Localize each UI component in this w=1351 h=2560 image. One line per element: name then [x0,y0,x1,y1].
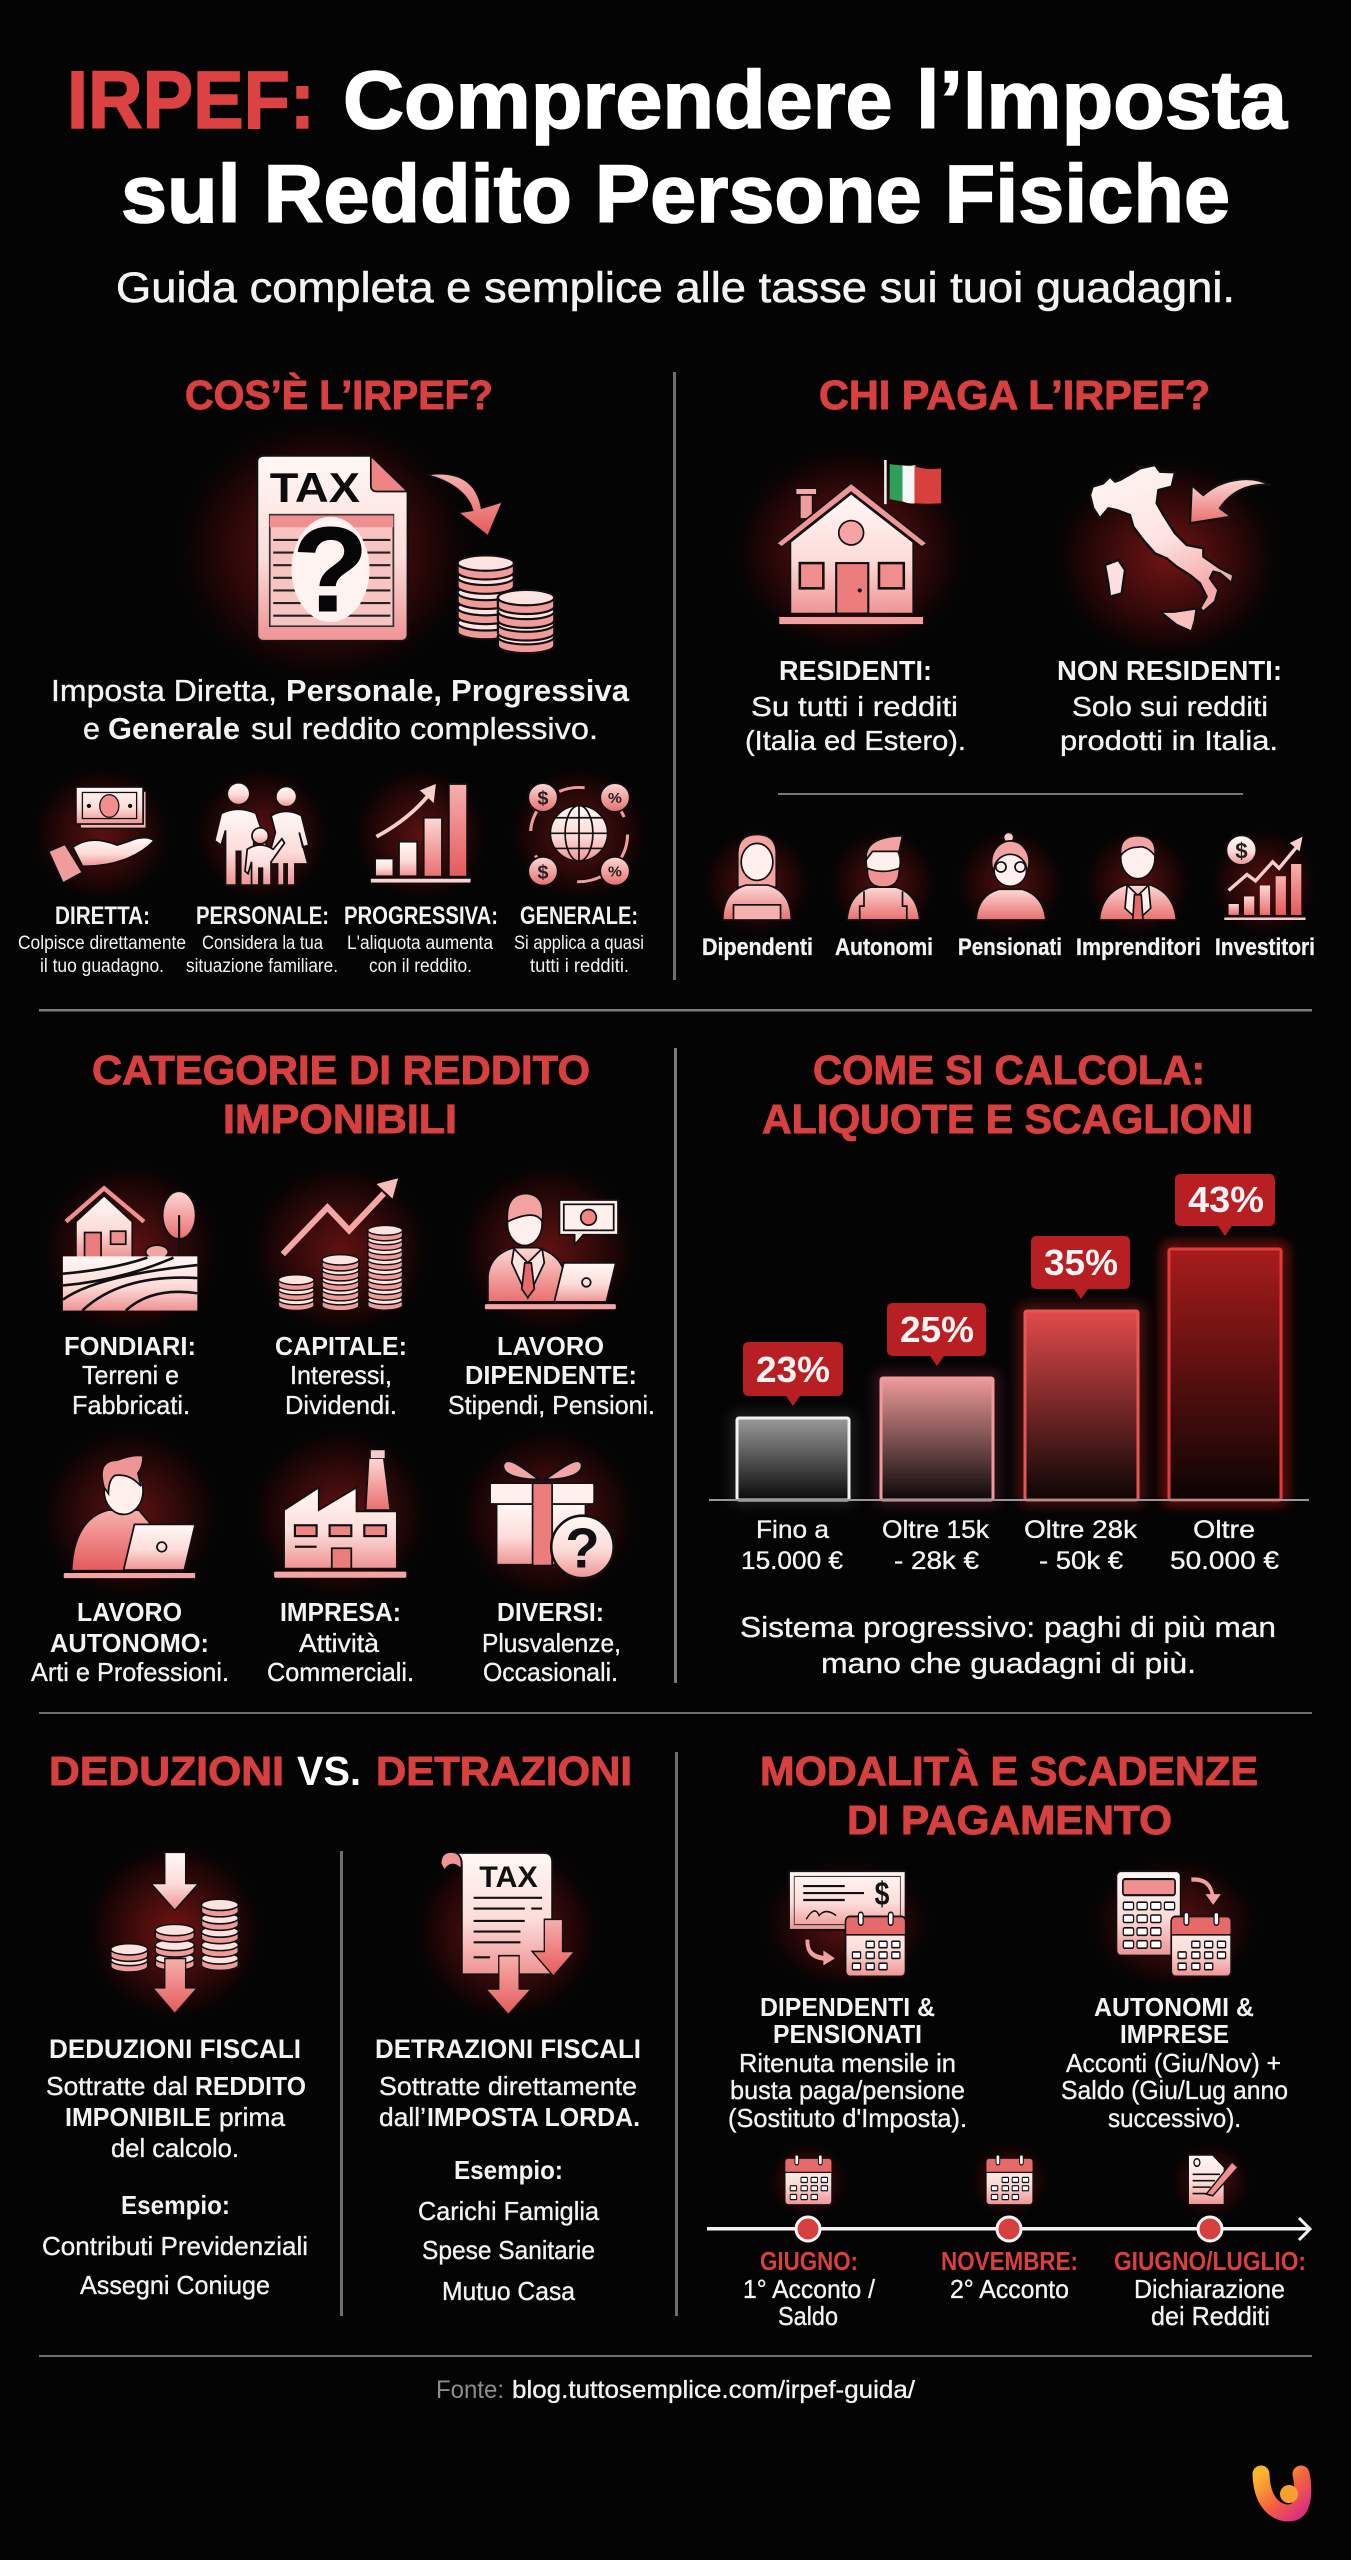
dipendenti text: (Sostituto d'Imposta). [728,2103,967,2133]
item: progressiva: con il reddito. [369,956,472,977]
bracket labels: Oltre 15k [882,1516,990,1544]
icon: gift with question mark [490,1461,614,1579]
heading: ALIQUOTE E SCAGLIONI [762,1096,1253,1142]
bracket labels: - 50k € [1039,1547,1123,1575]
heading: VS. [297,1748,361,1794]
icon: coin stacks [458,555,554,653]
caption: Sistema progressivo: paghi di più man [740,1612,1276,1644]
icon: dipendenti [723,835,791,920]
icon: investitori [1224,835,1306,920]
bar: 23% [737,1418,849,1500]
label: 43% [1175,1174,1275,1236]
panel: categorie di reddito [31,1047,655,1687]
item: progressiva [344,902,498,977]
label: 35%: 35% [1044,1242,1118,1283]
item: capitale [275,1331,407,1420]
taxpayer labels: Autonomi [835,934,933,961]
non residenti text: prodotti in Italia. [1060,725,1278,756]
dipendenti text [728,1992,967,2133]
icon: tax scroll with arrows [442,1853,575,2015]
milestone dot: giugno/luglio [1198,2217,1222,2241]
deduzioni text: REDDITO [195,2071,306,2101]
description text: Generale [108,711,240,746]
icon: autonomi [847,836,920,920]
deadline: giugno [743,2246,876,2331]
dipendenti text: busta paga/pensione [730,2075,965,2105]
icon: tax document: TAX [270,465,360,511]
deadline: giugno: GIUGNO: [760,2246,858,2276]
icon: factory [274,1450,406,1578]
item: personale: Considera la tua [202,933,323,954]
item: fondiari: Fabbricati. [72,1390,190,1420]
non residenti text [1057,655,1282,756]
description text: sul reddito complessivo. [251,711,598,746]
heading: DEDUZIONI [49,1748,284,1794]
dipendenti text: PENSIONATI [773,2019,922,2049]
heading [49,1748,632,1794]
taxpayer labels: Dipendenti [702,934,813,961]
item: impresa [267,1597,414,1687]
label: 25%: 25% [900,1309,974,1350]
heading: CHI PAGA L’IRPEF? [819,372,1210,418]
bar: 35% [1025,1311,1138,1500]
icon group [699,441,1322,940]
residenti text: Su tutti i redditi [751,691,958,722]
icon: hand with banknote [49,787,154,883]
autonomi text: IMPRESE [1120,2019,1229,2049]
item: personale [186,902,338,977]
item: lavoro dipendente: Stipendi, Pensioni. [448,1390,655,1420]
description text: Progressiva [451,673,630,708]
deadline: novembre: NOVEMBRE: [941,2246,1078,2276]
icon: tax document [257,456,408,641]
item: fondiari [64,1331,196,1420]
heading [92,1047,590,1142]
title line 1: Comprendere l’Imposta [343,55,1288,146]
icon: house with flag [776,460,941,624]
taxpayer labels: Investitori [1215,934,1315,961]
icon: tax document: ? [292,502,369,638]
detrazioni text: dall’ [379,2102,426,2132]
description text: e [83,711,100,746]
item: diretta: Colpisce direttamente [18,933,186,954]
bracket labels: - 28k € [894,1547,979,1575]
taxpayer labels: Pensionati [958,934,1062,961]
autonomi text: Saldo (Giu/Lug anno [1061,2075,1288,2105]
deadline: giugno/luglio [1114,2246,1306,2331]
heading: DI PAGAMENTO [847,1797,1172,1843]
icon: land and house [63,1188,197,1311]
item: personale: situazione familiare. [186,956,338,977]
item: diversi [482,1597,621,1687]
detrazioni text: Mutuo Casa [442,2276,576,2306]
item: capitale: Interessi, [290,1360,392,1390]
icon: deductions [111,1852,238,2014]
deadline: giugno/luglio: dei Redditi [1151,2301,1270,2331]
panel: chi paga l'irpef [699,372,1322,961]
detrazioni text: Esempio: [454,2155,563,2185]
icon row: main and small icons [28,412,653,906]
category icons [35,1159,644,1605]
item: generale: Si applica a quasi [514,933,644,954]
deduzioni text: IMPONIBILE [65,2102,211,2132]
icon: paycheck with calendar [789,1871,906,1977]
caption [740,1612,1276,1680]
detrazioni text: Carichi Famiglia [418,2196,600,2226]
item: capitale: CAPITALE: [275,1331,407,1361]
subtitle: Guida completa e semplice alle tasse sui tuoi guadagni. [116,264,1235,312]
bar: 25% [881,1378,993,1500]
description text: Personale, [286,673,442,708]
heading: MODALITÀ E SCADENZE [760,1748,1258,1794]
item: lavoro autonomo: AUTONOMO: [50,1628,209,1658]
icon: globe with coins: $ [537,862,549,883]
item: diretta [18,902,186,977]
icon: self-employed [64,1455,195,1578]
label: 23%: 23% [756,1349,830,1390]
timeline [707,2217,1310,2241]
title line 1: IRPEF: [67,55,315,146]
deadline: giugno/luglio: Dichiarazione [1134,2274,1285,2304]
milestone dot: novembre [997,2217,1021,2241]
icon: growth bars [371,784,471,883]
deduzioni text: prima [219,2102,286,2132]
deduzioni text: DEDUZIONI FISCALI [49,2034,301,2064]
deduzioni text: Contributi Previdenziali [42,2231,308,2261]
title line 2: sul Reddito Persone Fisiche [121,149,1230,240]
taxpayer labels [702,934,1315,961]
deduction and detraction icons [82,1838,605,2025]
residenti text [745,655,966,756]
panel: come si calcola [709,1047,1309,1680]
residenti text: RESIDENTI: [779,655,932,686]
item: diretta: DIRETTA: [55,902,150,930]
heading: COME SI CALCOLA: [813,1047,1205,1093]
deadline: giugno: 1° Acconto / [743,2274,876,2304]
icon: globe with coins [528,783,630,885]
item: fondiari: FONDIARI: [64,1331,196,1361]
icon: investitori: $ [1235,839,1248,864]
autonomi text: successivo). [1108,2103,1241,2133]
item: progressiva: PROGRESSIVA: [344,902,498,930]
bar: 43% [1169,1249,1281,1500]
bracket labels: 15.000 € [741,1547,843,1575]
icon: calendar november [986,2155,1033,2205]
description text [51,673,630,746]
item: lavoro autonomo [31,1597,229,1687]
autonomi text: Acconti (Giu/Nov) + [1066,2048,1281,2078]
detrazioni text: Spese Sanitarie [422,2235,595,2265]
item: impresa: Commerciali. [267,1657,414,1687]
non residenti text: NON RESIDENTI: [1057,655,1282,686]
item: impresa: IMPRESA: [280,1597,401,1627]
title block [67,55,1288,312]
description text: Imposta Diretta, [51,673,277,708]
icon: globe with coins: % [608,790,622,807]
bracket labels [741,1516,1279,1575]
item: generale: tutti i redditi. [530,956,629,977]
source line: Fonte: [436,2376,504,2404]
item: generale [514,902,644,977]
item: progressiva: L'aliquota aumenta [347,933,493,954]
detrazioni text: Sottratte direttamente [379,2071,637,2101]
panel: deduzioni vs detrazioni [42,1748,641,2306]
icon: calendar june [785,2155,832,2205]
bracket labels: 50.000 € [1170,1547,1279,1575]
item: diversi: DIVERSI: [497,1597,604,1627]
heading: DETRAZIONI [376,1748,632,1794]
icon: pensionati [976,832,1046,920]
deadline: giugno/luglio: GIUGNO/LUGLIO: [1114,2246,1306,2276]
icon: employee [485,1193,618,1309]
deduzioni text: del calcolo. [111,2133,239,2163]
item: capitale: Dividendi. [285,1390,397,1420]
icon: paycheck with calendar: $ [875,1876,890,1913]
icon: gift with question mark: ? [565,1516,600,1579]
item: generale: GENERALE: [520,902,638,930]
taxpayer labels: Imprenditori [1076,934,1201,961]
item: impresa: Attività [299,1628,380,1658]
item: lavoro autonomo: LAVORO [77,1597,182,1627]
non residenti text: Solo sui redditi [1072,691,1268,722]
bracket labels: Fino a [756,1516,829,1544]
icon: imprenditori [1099,836,1176,920]
heading: IMPONIBILI [223,1096,457,1142]
panel: cos'è l'irpef [18,372,653,977]
deduzioni text: Sottratte dal [46,2071,188,2101]
autonomi text [1061,1992,1288,2133]
bar chart [709,1174,1309,1501]
autonomi text: AUTONOMI & [1094,1992,1254,2022]
item: diversi: Occasionali. [483,1657,618,1687]
item: lavoro dipendente: DIPENDENTE: [465,1360,637,1390]
caption: mano che guadagni di più. [821,1648,1196,1680]
deduzioni text: Assegni Coniuge [80,2270,270,2300]
deduzioni text [42,2034,308,2300]
item: diversi: Plusvalenze, [482,1628,621,1658]
heading [760,1748,1258,1843]
icon: capital growth [278,1178,402,1311]
item: lavoro dipendente: LAVORO [497,1331,604,1361]
milestone dot: giugno [796,2217,820,2241]
label: 43%: 43% [1188,1179,1264,1220]
item: lavoro dipendente [448,1331,655,1420]
bracket labels: Oltre 28k [1024,1516,1138,1544]
deadline: giugno: Saldo [778,2301,838,2331]
deduzioni text: Esempio: [121,2190,230,2220]
icon: family [215,783,309,885]
dipendenti text: Ritenuta mensile in [739,2048,956,2078]
label: 35% [1031,1236,1130,1299]
payment icons [757,1854,1264,2221]
icon: tax form and pen [1188,2155,1238,2205]
deadline: novembre: 2° Acconto [950,2274,1069,2304]
item: diretta: il tuo guadagno. [40,956,164,977]
heading: CATEGORIE DI REDDITO [92,1047,590,1093]
icon: tax scroll with arrows: TAX [479,1860,538,1894]
detrazioni text: IMPOSTA LORDA. [427,2102,640,2132]
heading [762,1047,1253,1142]
source line: blog.tuttosemplice.com/irpef-guida/ [512,2376,915,2404]
panel: modalità e scadenze [707,1748,1310,2331]
icon: curved arrow [427,474,502,536]
icon: italy map with arrow [1090,465,1270,632]
bracket labels: Oltre [1193,1516,1255,1544]
dipendenti text: DIPENDENTI & [760,1992,935,2022]
heading: COS’È L’IRPEF? [185,372,493,418]
item: fondiari: Terreni e [82,1360,179,1390]
logo [1261,2474,1303,2513]
residenti text: (Italia ed Estero). [745,725,966,756]
label: 23% [743,1342,843,1406]
icon: globe with coins: % [608,864,622,881]
item: personale: PERSONALE: [196,902,329,930]
deadline: novembre [941,2246,1078,2304]
icon: calculator with calendar [1116,1871,1231,1977]
label: 25% [887,1303,986,1366]
item: lavoro autonomo: Arti e Professioni. [31,1657,229,1687]
icon: globe with coins: $ [537,788,549,810]
detrazioni text: DETRAZIONI FISCALI [375,2034,641,2064]
detrazioni text [375,2034,641,2306]
